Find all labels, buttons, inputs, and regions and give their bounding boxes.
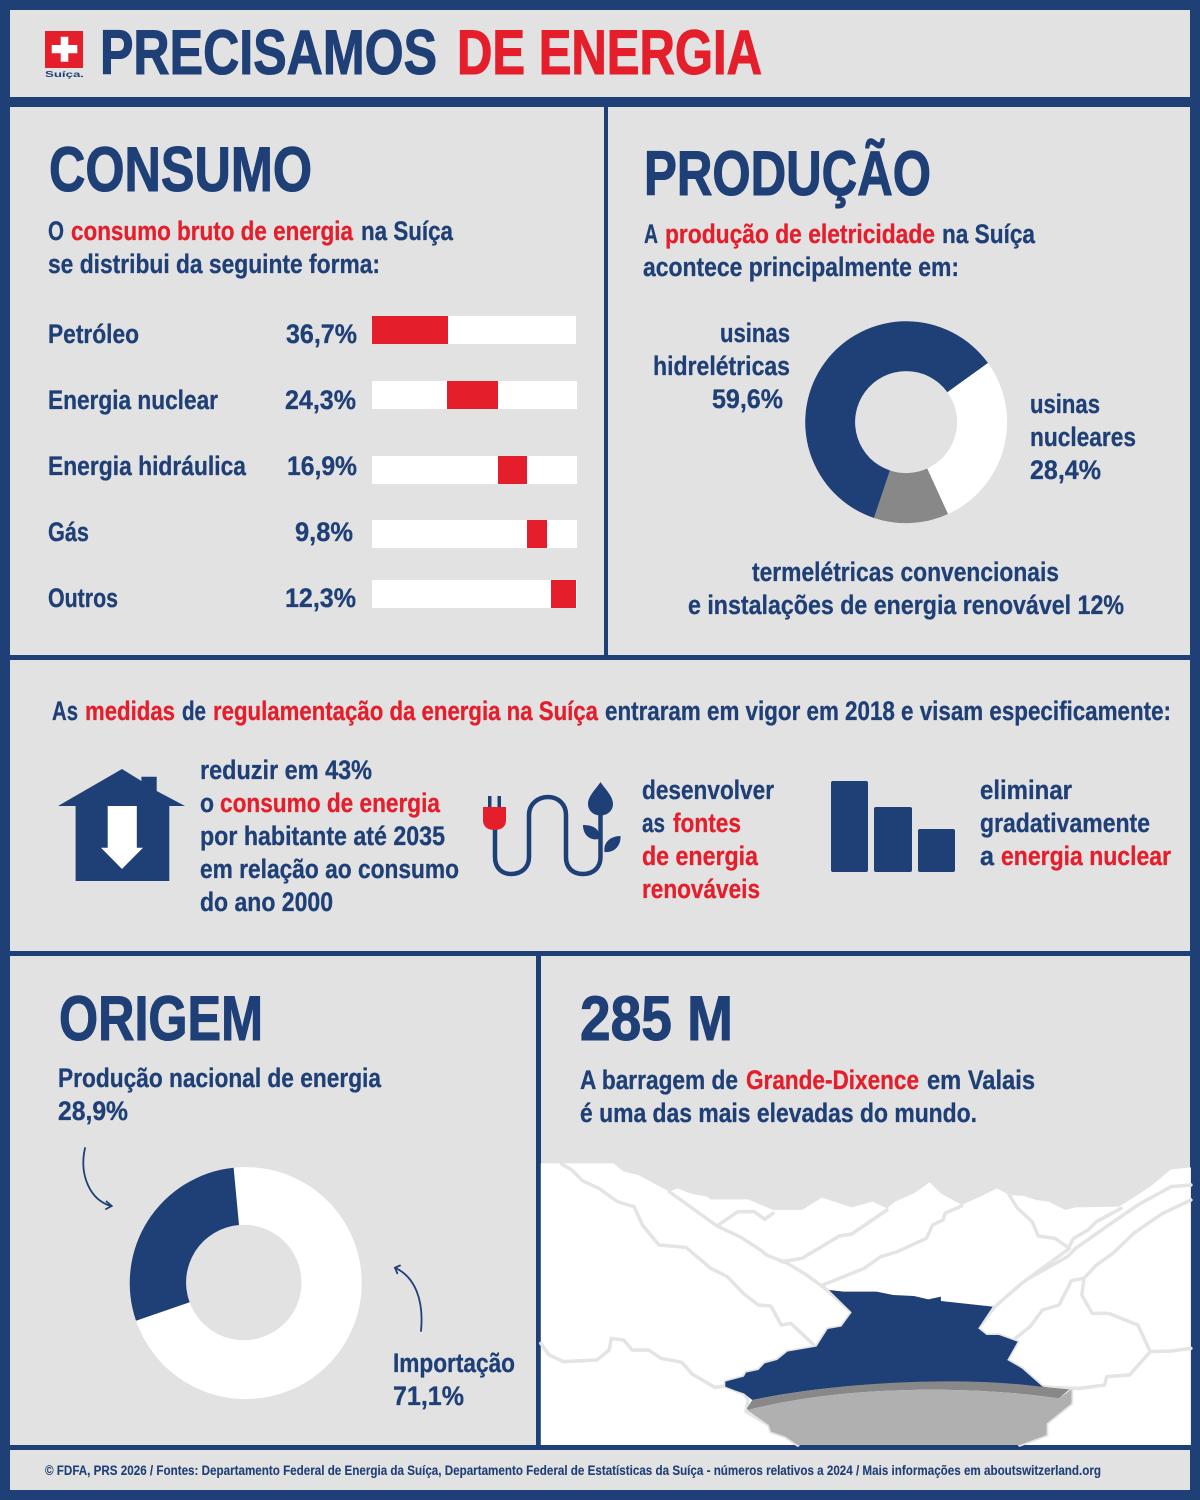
intro text: consumo [48,216,454,279]
title: DE ENERGIA [457,18,762,88]
text: eliminar: a [980,841,995,871]
text: reduzir: o [200,788,214,818]
reservoir water [725,1290,1059,1400]
arrow: to national share [83,1148,112,1209]
text: reduzir [200,755,459,917]
text: desenvolver: de energia [642,841,759,871]
label: produção nacional: Produção nacional de energia [58,1063,382,1093]
illustration: mountains and dam [541,1163,1191,1445]
row: outros: 12,3% [285,583,356,613]
heading: medidas: regulamentação da energia na Suíça [213,696,599,726]
label: termelétricas: termelétricas convencionais [752,557,1059,587]
panel: barragem [541,956,1191,1445]
label: importação: 71,1% [393,1381,464,1411]
row: energia hidráulica: Energia hidráulica [48,451,247,481]
intro text: produção: A [644,219,658,249]
text: desenvolver: renováveis [642,874,760,904]
dam crest [747,1381,1069,1410]
text: desenvolver [642,775,774,904]
text: reduzir: por habitante até 2035 [200,821,445,851]
heading: medidas [52,696,1171,726]
label: nucleares [1030,389,1136,485]
intro text: consumo: consumo bruto de energia [71,216,354,246]
logo: Swiss flag: Suíça. [45,69,84,79]
label: produção nacional: 28,9% [58,1096,128,1126]
icon: descending bars [831,781,955,872]
panel: produção [608,107,1190,655]
heading: consumo: CONSUMO [49,135,312,205]
text: barragem: Grande-Dixence [746,1065,919,1095]
intro text: produção: acontece principalmente em: [643,252,959,282]
row: energia hidráulica [48,451,577,484]
row: gás [48,517,577,548]
text: reduzir: reduzir em 43% [200,755,372,785]
intro text: consumo: na Suíça [361,216,454,246]
title: PRECISAMOS [100,18,437,88]
row: outros [48,580,577,613]
text: barragem [580,1065,1035,1128]
label: nucleares: 28,4% [1030,455,1101,485]
heading: medidas: medidas [85,696,175,726]
row: energia nuclear [48,381,577,415]
text: eliminar: eliminar [980,775,1072,805]
intro text: produção [643,219,1036,282]
label: produção nacional [58,1063,382,1126]
label: hidrelétricas [653,318,790,414]
heading: produção: PRODUÇÃO [644,138,931,209]
label: nucleares: usinas [1030,389,1100,419]
text: eliminar: energia nuclear [1001,841,1171,871]
arrow: to imports [395,1266,422,1331]
title [100,18,762,88]
label: hidrelétricas: hidrelétricas [653,351,790,381]
text: desenvolver: as [642,808,665,838]
heading: origem: ORIGEM [59,984,263,1054]
text: reduzir: consumo de energia [220,788,441,818]
text: reduzir: do ano 2000 [200,887,333,917]
panel: consumo [10,107,604,655]
label: termelétricas [688,557,1124,620]
row: gás: Gás [48,517,89,547]
label: nucleares: nucleares [1030,422,1136,452]
row: outros: Outros [48,583,118,613]
row: petróleo: Petróleo [48,319,139,349]
heading: 285 m: 285 M [580,984,733,1054]
icon: house with down arrow [58,769,185,881]
footer [10,1450,1190,1490]
label: termelétricas: e instalações de energia renovável 12% [688,590,1124,620]
bar chart: energy consumption [48,316,577,613]
label: hidrelétricas: 59,6% [712,384,783,414]
header panel [10,10,1190,97]
panel: origem [10,956,536,1445]
label: importação: Importação [393,1348,515,1378]
row: gás: 9,8% [295,517,353,547]
text: barragem: é uma das mais elevadas do mundo. [580,1098,977,1128]
label: hidrelétricas: usinas [720,318,790,348]
text: reduzir: em relação ao consumo [200,854,459,884]
donut chart: origin [130,1167,362,1399]
text: eliminar [980,775,1171,871]
row: energia nuclear: Energia nuclear [48,385,218,415]
text: desenvolver: desenvolver [642,775,774,805]
logo: Swiss flag [45,31,84,79]
icon: plug and plant [483,782,621,874]
row: energia nuclear: 24,3% [285,385,356,415]
donut chart: electricity production [805,321,1007,523]
label: importação [393,1348,515,1411]
panel: medidas [10,660,1190,951]
text: barragem: em Valais [927,1065,1035,1095]
heading: medidas: As [52,696,78,726]
intro text: consumo: O [48,216,64,246]
dam face [747,1389,1071,1445]
text: barragem: A barragem de [580,1065,738,1095]
text: eliminar: gradativamente [980,808,1150,838]
row: petróleo: 36,7% [286,319,357,349]
heading: medidas: de [182,696,206,726]
text: desenvolver: fontes [673,808,741,838]
intro text: produção: na Suíça [942,219,1036,249]
intro text: consumo: se distribui da seguinte forma: [48,249,380,279]
row: energia hidráulica: 16,9% [287,451,357,481]
row: petróleo [48,316,576,349]
intro text: produção: produção de eletricidade [665,219,935,249]
